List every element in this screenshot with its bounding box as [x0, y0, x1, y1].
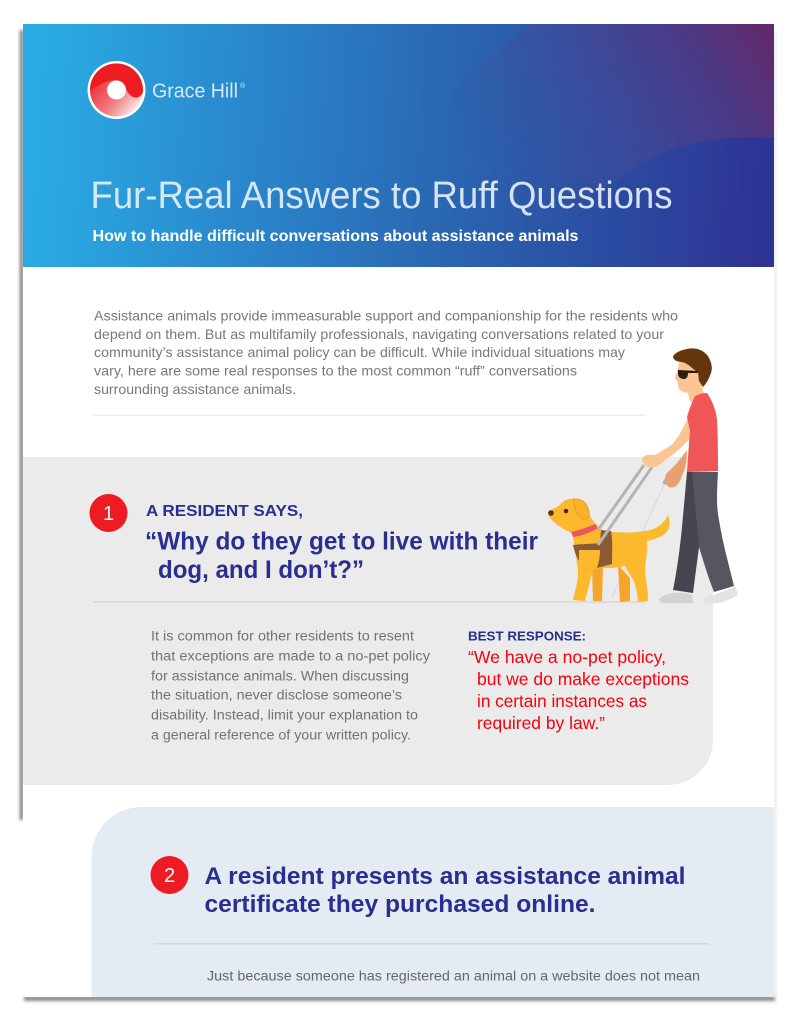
title: Fur-Real Answers to Ruff Questions [90, 175, 672, 217]
best response quote: “We have a no-pet policy, [468, 647, 666, 667]
explanation text: the situation, never disclose someone’s [151, 688, 402, 702]
intro text: community’s assistance animal policy can be difficult. While individual situations may [94, 345, 625, 360]
explanation text: disability. Instead, limit your explanation to [151, 708, 418, 722]
explanation text [151, 628, 430, 742]
number badge 2: 2 [164, 865, 175, 887]
best response quote: in certain instances as [477, 691, 647, 711]
icon: guide dog [548, 465, 670, 602]
question quote [145, 528, 538, 584]
best response quote: but we do make exceptions [477, 669, 689, 689]
scenario heading: A resident presents an assistance animal [204, 863, 686, 890]
resident says label: A RESIDENT SAYS, [146, 503, 303, 520]
logo: ® [240, 82, 246, 90]
explanation text: for assistance animals. When discussing [151, 668, 409, 684]
icon: man [612, 348, 738, 604]
illustration: man with guide dog [548, 348, 738, 604]
explanation text: Just because someone has registered an animal on a website does not mean [207, 968, 700, 984]
scenario heading: certificate they purchased online. [204, 891, 596, 918]
best response label: BEST RESPONSE: [468, 628, 586, 644]
intro text: surrounding assistance animals. [94, 382, 296, 397]
logo [88, 61, 246, 119]
logo: Grace Hill [152, 80, 238, 102]
intro text: depend on them. But as multifamily professionals, navigating conversations related to your [94, 327, 664, 342]
scenario heading [204, 863, 686, 918]
number badge 1: 1 [103, 503, 114, 525]
explanation text: It is common for other residents to resent [151, 628, 414, 644]
number badge 2 [150, 856, 188, 894]
panel: question 2 [92, 807, 774, 997]
intro text [94, 308, 678, 397]
number badge 1 [90, 494, 128, 532]
panel: question 1 [23, 457, 713, 785]
explanation text: a general reference of your written policy. [151, 728, 411, 742]
subtitle: How to handle difficult conversations about assistance animals [92, 228, 578, 245]
intro text: Assistance animals provide immeasurable support and companionship for the residents who [94, 308, 678, 324]
explanation text: that exceptions are made to a no-pet policy [151, 648, 430, 664]
question quote: dog, and I don’t?” [158, 556, 364, 584]
question quote: “Why do they get to live with their [145, 528, 538, 556]
best response quote: required by law.” [477, 713, 605, 733]
intro text: vary, here are some real responses to the most common “ruff” conversations [94, 364, 577, 378]
header banner [23, 24, 774, 267]
best response quote [468, 647, 689, 733]
